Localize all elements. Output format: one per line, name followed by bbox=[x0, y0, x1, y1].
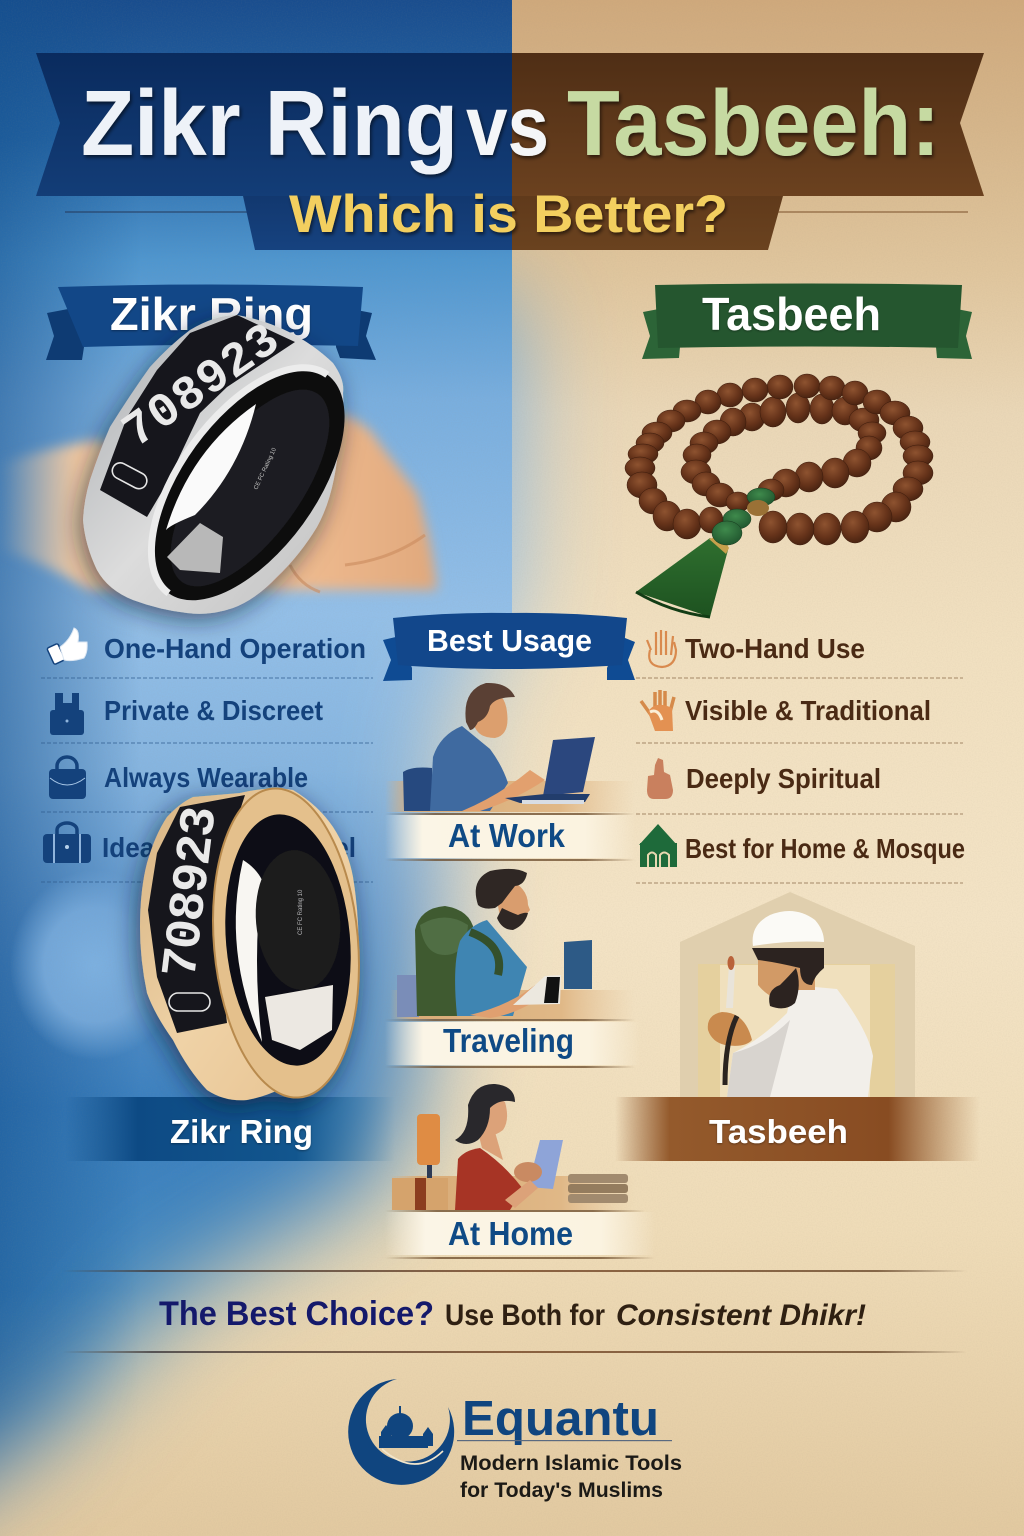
conclusion: The Best Choice: The Best Choice? bbox=[159, 1295, 434, 1333]
table bbox=[390, 990, 635, 1019]
niche inner frame bbox=[698, 964, 895, 1097]
photo: hand holding silver ring bbox=[0, 314, 437, 633]
text: Best for Home & Mosque: Best for Home & Mosque bbox=[685, 833, 965, 864]
tablet bbox=[564, 940, 592, 989]
text: Two-Hand Use: Two-Hand Use bbox=[685, 633, 865, 664]
hair bbox=[752, 948, 824, 985]
face bbox=[475, 1096, 507, 1136]
icon: green mosque house bbox=[639, 824, 677, 867]
bar label: Tasbeeh: Tasbeeh bbox=[709, 1113, 848, 1150]
hair bbox=[455, 1084, 515, 1144]
fingers crease bbox=[290, 535, 425, 592]
usage scene: at work bbox=[385, 683, 635, 861]
label band bbox=[385, 1022, 640, 1065]
robe bbox=[727, 985, 873, 1097]
hair bbox=[465, 683, 515, 730]
photo: prayer beads bbox=[625, 374, 933, 617]
display pill icon bbox=[169, 993, 210, 1011]
suitcase bbox=[397, 975, 419, 1017]
usage scene: at home bbox=[385, 1084, 655, 1259]
laptop bbox=[543, 737, 595, 796]
text: Ideal for Daily Travel: Ideal for Daily Travel bbox=[102, 832, 356, 863]
outer loop beads bbox=[625, 374, 933, 545]
ribbon: Zikr Ring heading: Zikr Ring bbox=[110, 288, 313, 340]
silver ring bbox=[83, 314, 382, 633]
face bbox=[498, 884, 530, 925]
backpack pocket bbox=[420, 918, 468, 955]
forearm bbox=[462, 770, 545, 811]
banner left half bbox=[36, 53, 512, 196]
icon: open hand outline bbox=[647, 630, 676, 667]
cap bbox=[753, 911, 824, 946]
strap bbox=[470, 932, 499, 975]
lamp bbox=[417, 1114, 440, 1165]
ribbon: Tasbeeh heading: Tasbeeh bbox=[702, 288, 881, 340]
text: Always Wearable: Always Wearable bbox=[104, 762, 308, 793]
tassel bbox=[636, 538, 728, 617]
gold rim bbox=[201, 782, 371, 1104]
bar: Tasbeeh bbox=[615, 1097, 980, 1161]
display digits: 708923 bbox=[114, 314, 290, 460]
text: Private & Discreet: Private & Discreet bbox=[104, 695, 323, 726]
title banner bbox=[36, 53, 984, 250]
books bbox=[568, 1174, 628, 1203]
text: One-Hand Operation: One-Hand Operation bbox=[104, 633, 366, 664]
backpack bbox=[415, 906, 474, 1016]
conclusion: Use Both: Use Both for bbox=[445, 1299, 605, 1332]
white arc bbox=[382, 1449, 443, 1464]
stick bbox=[726, 965, 735, 1008]
right features list bbox=[636, 630, 965, 883]
robe shade bbox=[727, 1020, 790, 1097]
label: At Home bbox=[448, 1215, 573, 1252]
table bbox=[385, 781, 635, 812]
hand bbox=[0, 413, 437, 590]
banner right half bbox=[512, 53, 984, 196]
forearm bbox=[470, 985, 545, 1018]
papers bbox=[522, 800, 584, 804]
usage scene: traveling bbox=[385, 869, 640, 1068]
inner grey reflection bbox=[167, 523, 223, 573]
text: Visible & Traditional: Visible & Traditional bbox=[685, 695, 931, 726]
laptop base bbox=[505, 794, 590, 803]
tagline line 2: for Today's Muslims bbox=[460, 1479, 663, 1502]
black display panel bbox=[100, 315, 295, 517]
shirt bbox=[455, 920, 527, 1016]
device screen bbox=[544, 977, 560, 1003]
icon: handbag bbox=[49, 757, 86, 799]
subtitle: Which is Better? bbox=[289, 185, 728, 244]
decorative side lines behind subtitle bbox=[65, 211, 968, 213]
black display panel bbox=[148, 795, 245, 1033]
neck bbox=[478, 1132, 503, 1160]
crescent bbox=[348, 1379, 454, 1485]
photo: gold ring bbox=[140, 782, 371, 1104]
icon: thumbs up bbox=[47, 628, 87, 665]
window light bbox=[720, 965, 870, 1097]
title: Zikr Ring: Zikr Ring bbox=[81, 71, 458, 175]
mosque silhouette bbox=[379, 1406, 433, 1448]
display digits: 708923 bbox=[153, 803, 231, 981]
device bbox=[513, 975, 561, 1005]
inner engraving: CE FC Rating 10 bbox=[253, 447, 278, 491]
inner wall bbox=[141, 365, 359, 611]
strap bbox=[725, 1016, 737, 1085]
stick tip bbox=[728, 956, 734, 970]
inner white reflection bbox=[166, 404, 256, 530]
conclusion: Consistent Dhikr: Consistent Dhikr! bbox=[616, 1299, 866, 1332]
text: Deeply Spiritual: Deeply Spiritual bbox=[686, 763, 881, 794]
title: vs: vs bbox=[466, 79, 549, 174]
icon: raised hand bbox=[641, 690, 674, 731]
illustration: man praying with tasbeeh bbox=[680, 892, 915, 1097]
green and tan accent beads bbox=[712, 488, 775, 545]
display pill icon bbox=[109, 460, 150, 492]
hair bbox=[476, 869, 527, 909]
lamp stem bbox=[427, 1165, 432, 1179]
arm bbox=[505, 1180, 538, 1208]
ribbon: Best Usage: Best Usage bbox=[427, 623, 592, 658]
box ribbon bbox=[415, 1178, 426, 1210]
tablet bbox=[528, 1140, 563, 1189]
gift box bbox=[392, 1178, 448, 1210]
hands bbox=[708, 1012, 752, 1046]
inner engraving: CE FC Rating 10 bbox=[298, 889, 304, 935]
label band bbox=[385, 815, 635, 858]
conclusion bbox=[62, 1270, 967, 1353]
lower inner reflection bbox=[265, 985, 333, 1050]
ribbon: Zikr Ring heading bbox=[46, 284, 376, 360]
logo: Equantu bbox=[348, 1379, 682, 1502]
icon: praying hand bbox=[647, 758, 673, 799]
subtitle banner left half bbox=[243, 196, 512, 250]
ring label bars bbox=[65, 1097, 980, 1161]
dark inner rim bbox=[215, 809, 361, 1071]
hand bbox=[514, 1162, 542, 1182]
subtitle banner right half bbox=[512, 196, 783, 250]
beard bbox=[497, 908, 528, 930]
tagline line 1: Modern Islamic Tools bbox=[460, 1452, 682, 1475]
woman's body bbox=[455, 1148, 523, 1210]
neck and face bbox=[758, 950, 815, 1000]
ribbon: Tasbeeh heading bbox=[642, 284, 972, 359]
ribbon: Best Usage bbox=[383, 613, 635, 681]
bar: Zikr Ring bbox=[65, 1097, 395, 1161]
chair bbox=[403, 768, 432, 811]
niche background bbox=[680, 892, 915, 1097]
icon: suitcase bbox=[43, 823, 91, 863]
title: Tasbeeh: Tasbeeh: bbox=[567, 71, 940, 175]
label band bbox=[385, 1212, 655, 1255]
head bbox=[469, 690, 508, 738]
inner loop beads bbox=[681, 393, 886, 512]
bar labels bbox=[170, 1113, 848, 1150]
silver rim edge bbox=[114, 335, 327, 593]
wordmark: Equantu bbox=[462, 1392, 659, 1446]
tassel hem bbox=[636, 592, 710, 617]
dark opening bbox=[114, 335, 382, 633]
bar label: Zikr Ring: Zikr Ring bbox=[170, 1113, 313, 1150]
inner white reflection bbox=[236, 860, 262, 1042]
label: At Work bbox=[448, 817, 566, 854]
table bbox=[390, 1176, 635, 1210]
beard bbox=[769, 968, 799, 1008]
inner band highlight bbox=[250, 847, 346, 993]
label: Traveling bbox=[443, 1022, 574, 1059]
gold cap bbox=[709, 535, 729, 554]
left features list bbox=[41, 628, 373, 882]
icon: lock bbox=[50, 693, 84, 735]
man body bbox=[430, 726, 508, 811]
